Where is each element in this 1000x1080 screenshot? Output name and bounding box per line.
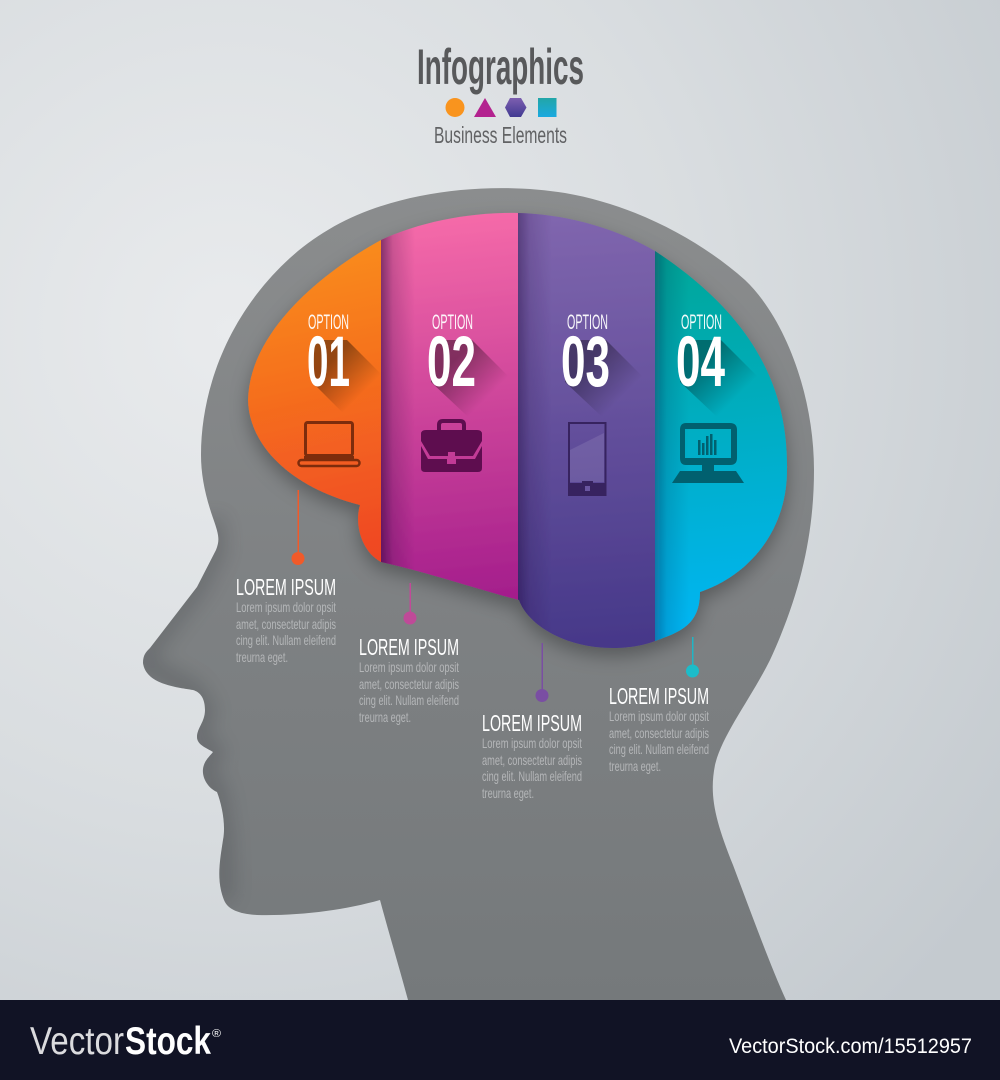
option 2 label: 02 xyxy=(427,323,476,402)
text block 3: Lorem ipsum dolor opsit xyxy=(482,735,582,751)
footer logo: ® xyxy=(212,1028,221,1040)
text block 1: treurna eget. xyxy=(236,649,288,665)
option 3 label: 03 xyxy=(561,323,610,402)
pin 2 xyxy=(404,583,416,624)
icon: orange circle xyxy=(446,98,464,117)
text block 3 xyxy=(482,710,582,801)
title: Infographics xyxy=(417,39,584,95)
text block 2 xyxy=(359,634,459,725)
text block 3: treurna eget. xyxy=(482,785,534,801)
icon: desktop monitor xyxy=(672,423,744,483)
text block 4: amet, consectetur adipis xyxy=(609,725,709,741)
footer band xyxy=(0,1000,1000,1080)
option 1 label: OPTION xyxy=(308,311,349,334)
icon: laptop xyxy=(298,422,360,466)
subtitle: Business Elements xyxy=(434,122,567,148)
footer logo xyxy=(30,1020,221,1063)
brain xyxy=(240,200,795,660)
panel: option 3 purple xyxy=(518,200,655,660)
text block 4: cing elit. Nullam eleifend xyxy=(609,741,709,757)
text block 3: amet, consectetur adipis xyxy=(482,752,582,768)
icon: briefcase xyxy=(421,421,482,472)
footer url: VectorStock.com/15512957 xyxy=(729,1035,972,1058)
text block 3: cing elit. Nullam eleifend xyxy=(482,768,582,784)
panel: option 4 teal xyxy=(651,251,794,651)
text block 2: Lorem ipsum dolor opsit xyxy=(359,659,459,675)
text block 2: cing elit. Nullam eleifend xyxy=(359,692,459,708)
option 4 label xyxy=(676,311,725,402)
pin 3 xyxy=(536,643,548,702)
text block 3: LOREM IPSUM xyxy=(482,710,582,736)
text block 2: amet, consectetur adipis xyxy=(359,676,459,692)
icon: teal square xyxy=(538,98,556,117)
icon: smartphone xyxy=(569,423,606,496)
icon: magenta triangle xyxy=(474,98,496,117)
text block 4: LOREM IPSUM xyxy=(609,683,709,709)
panel: option 2 pink xyxy=(381,200,518,620)
panel: option 1 orange xyxy=(241,240,384,568)
option 3 label xyxy=(561,311,610,402)
option 3 label: OPTION xyxy=(567,311,608,334)
text block 2: LOREM IPSUM xyxy=(359,634,459,660)
option 1 label xyxy=(307,311,350,402)
text block 4 xyxy=(609,683,709,774)
footer logo: Vector xyxy=(30,1020,124,1063)
long shadows for numbers xyxy=(314,340,752,413)
head silhouette xyxy=(143,188,814,1000)
pin 4 xyxy=(686,637,699,678)
option 2 label: OPTION xyxy=(432,311,473,334)
text block 4: treurna eget. xyxy=(609,758,661,774)
icon detail: equalizer bars xyxy=(698,434,716,455)
pin 1 xyxy=(292,490,304,565)
text block 1: LOREM IPSUM xyxy=(236,574,336,600)
text block 1: Lorem ipsum dolor opsit xyxy=(236,599,336,615)
option 1 label: 01 xyxy=(307,323,350,402)
text block 4: Lorem ipsum dolor opsit xyxy=(609,708,709,724)
text block 1: amet, consectetur adipis xyxy=(236,616,336,632)
text block 2: treurna eget. xyxy=(359,709,411,725)
title block xyxy=(417,39,584,148)
text block 1: cing elit. Nullam eleifend xyxy=(236,632,336,648)
text block 1 xyxy=(236,574,336,665)
option 4 label: OPTION xyxy=(681,311,722,334)
option 4 label: 04 xyxy=(676,323,725,402)
option 2 label xyxy=(427,311,476,402)
icon: purple hexagon xyxy=(505,98,526,117)
footer logo: Stock xyxy=(125,1020,211,1063)
